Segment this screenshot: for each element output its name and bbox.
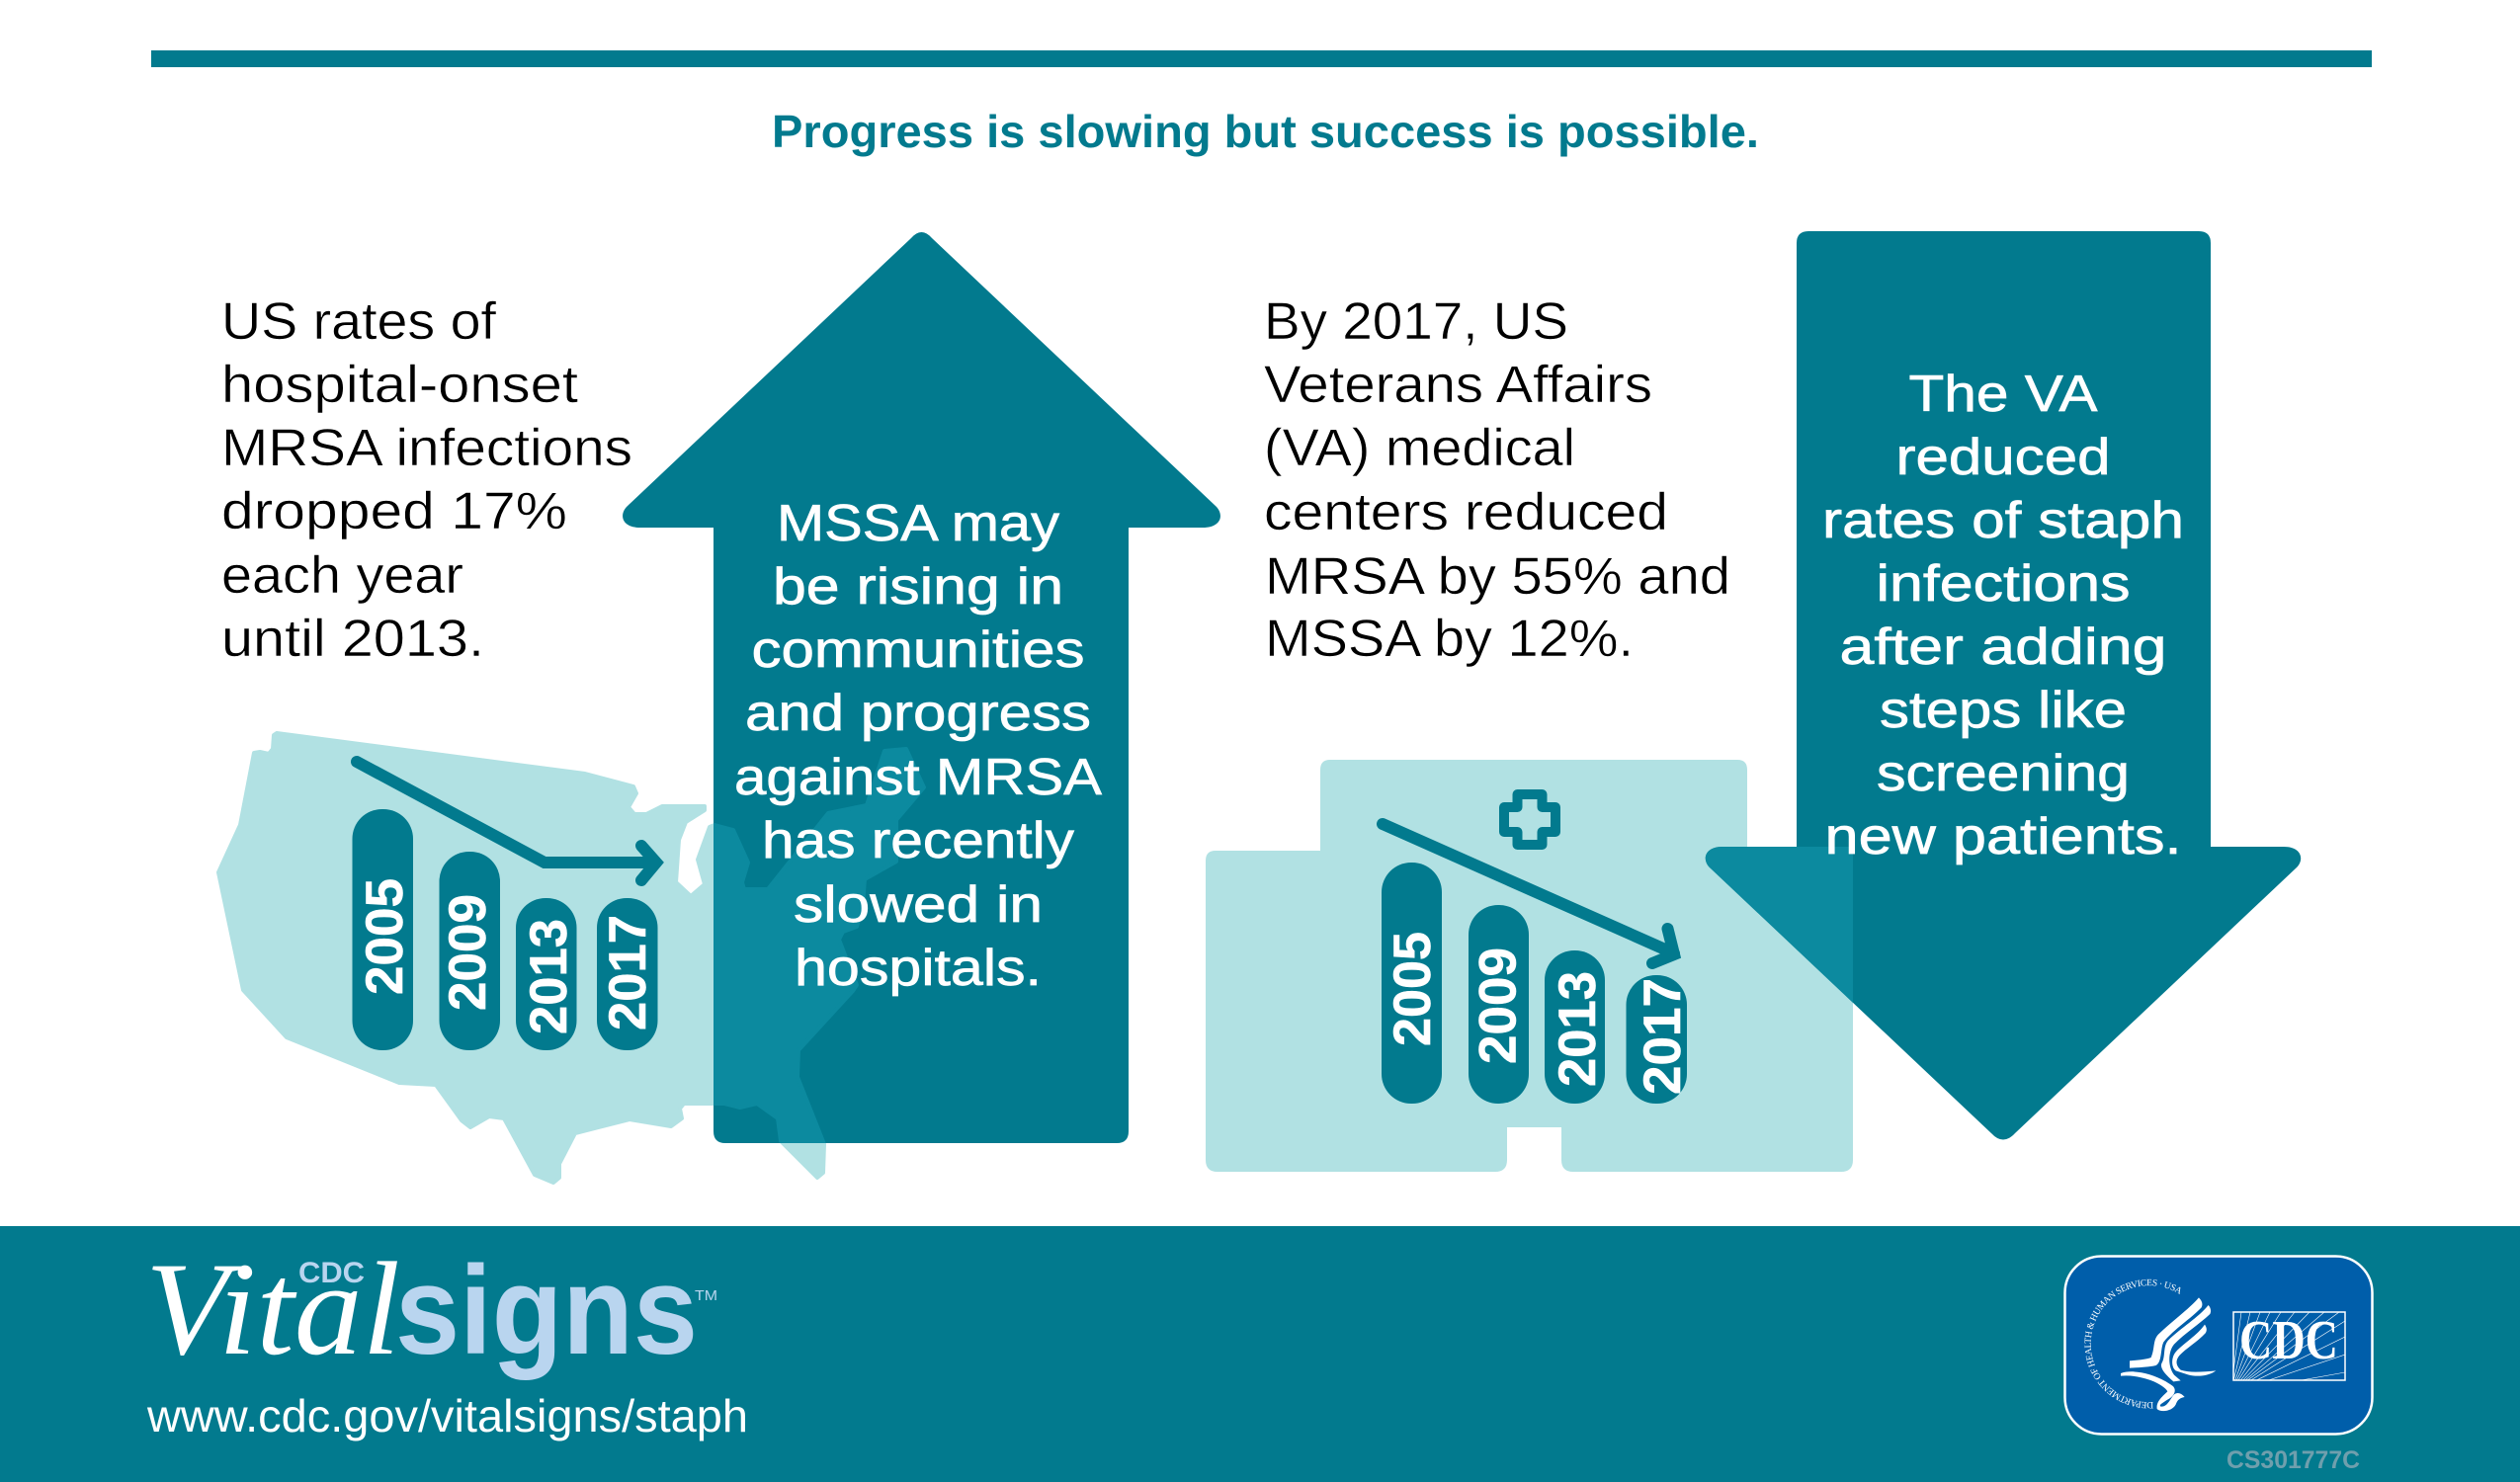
text block: VA reductions: MSSA by 12%.	[1265, 610, 1634, 668]
down arrow text: rates of staph	[1822, 492, 2184, 549]
down arrow text: The VA	[1909, 366, 2098, 423]
text block: US MRSA rates: until 2013.	[221, 610, 484, 668]
logo: CDC Vital Signs: signs	[395, 1240, 698, 1380]
up arrow shape	[623, 232, 1220, 1143]
down arrow panel: VA	[1700, 231, 2301, 1172]
text block: VA reductions: (VA) medical	[1264, 419, 1575, 477]
up arrow panel: MSSA	[623, 232, 1220, 1143]
down arrow text: infections	[1876, 555, 2131, 613]
up arrow text: MSSA may	[777, 495, 1059, 552]
text block: US MRSA rates: hospital-onset	[221, 356, 578, 414]
hospital overlap seen through arrow	[1706, 847, 1853, 1003]
bar: 2009: 2009	[439, 894, 497, 1011]
title: Progress is slowing but success is possible.	[772, 106, 1759, 157]
text block: VA reductions: By 2017, US	[1264, 292, 1568, 351]
up arrow text: and progress	[745, 685, 1091, 742]
up arrow text: has recently	[762, 812, 1074, 869]
logo: CDC Vital Signs: CDC	[298, 1257, 365, 1289]
text block: VA reductions: Veterans Affairs	[1264, 356, 1652, 414]
down arrow text: new patients.	[1824, 808, 2182, 865]
up arrow text: communities	[751, 621, 1085, 679]
down arrow text: reduced	[1895, 429, 2111, 486]
text block: US MRSA rates	[221, 292, 632, 668]
bar: 2017: 2017	[599, 915, 657, 1030]
publication code: CS301777C	[2226, 1446, 2360, 1474]
down arrow text	[1822, 366, 2184, 865]
map of the United States	[218, 733, 924, 1183]
text block: VA reductions	[1264, 292, 1730, 668]
arrow: decline	[1383, 824, 1674, 963]
down arrow shape	[1706, 231, 2301, 1140]
bar: 2013: 2013	[1549, 971, 1607, 1087]
down arrow text: steps like	[1880, 682, 2127, 739]
top rule	[151, 50, 2372, 67]
map overlap seen through arrow	[714, 747, 926, 1143]
footer band	[0, 1226, 2520, 1482]
bar: 2013: 2013	[520, 919, 578, 1034]
up arrow text: slowed in	[794, 876, 1043, 934]
down arrow text: after adding	[1840, 618, 2166, 676]
text block: US MRSA rates: dropped 17%	[221, 482, 567, 540]
logo: CDC Vital Signs: Vital	[145, 1236, 400, 1383]
text block: US MRSA rates: US rates of	[221, 292, 496, 351]
HHS eagle	[2121, 1297, 2216, 1411]
up arrow text: hospitals.	[795, 940, 1042, 997]
bar: 2005	[1382, 863, 1442, 1104]
up arrow text: be rising in	[773, 558, 1063, 616]
hospital building	[1206, 760, 1853, 1172]
bar: 2009: 2009	[1469, 947, 1528, 1064]
logo: CDC Vital Signs	[145, 1236, 717, 1383]
logo: HHS and CDC badge	[2063, 1255, 2374, 1436]
chart: hospital building with declining bars	[1206, 760, 1853, 1172]
text block: US MRSA rates: MRSA infections	[221, 419, 632, 477]
logo: CDC Vital Signs: TM	[695, 1287, 717, 1304]
bar: 2005: 2005	[356, 878, 414, 995]
up arrow text: against MRSA	[734, 749, 1102, 806]
down arrow text: screening	[1877, 745, 2130, 802]
bar: 2009	[1469, 905, 1529, 1104]
text block: VA reductions: centers reduced	[1264, 483, 1668, 541]
icon: medical cross	[1504, 794, 1555, 845]
text block: VA reductions: MRSA by 55% and	[1265, 547, 1730, 606]
bar: 2005: 2005	[1384, 932, 1442, 1046]
CDC mark: CDC	[2239, 1310, 2338, 1371]
web address: www.cdc.gov/vitalsigns/staph	[146, 1390, 748, 1441]
bar: 2005	[352, 809, 414, 1050]
chart: US map with declining bars	[218, 733, 924, 1183]
up arrow text	[734, 495, 1102, 997]
arrow: decline then flat	[357, 762, 656, 880]
bar: 2017: 2017	[1634, 978, 1692, 1095]
bar: 2009	[439, 852, 500, 1050]
text block: US MRSA rates: each year	[221, 546, 463, 605]
HHS seal text: DEPARTMENT OF HEALTH & HUMAN SERVICES · USA	[2084, 1278, 2180, 1409]
